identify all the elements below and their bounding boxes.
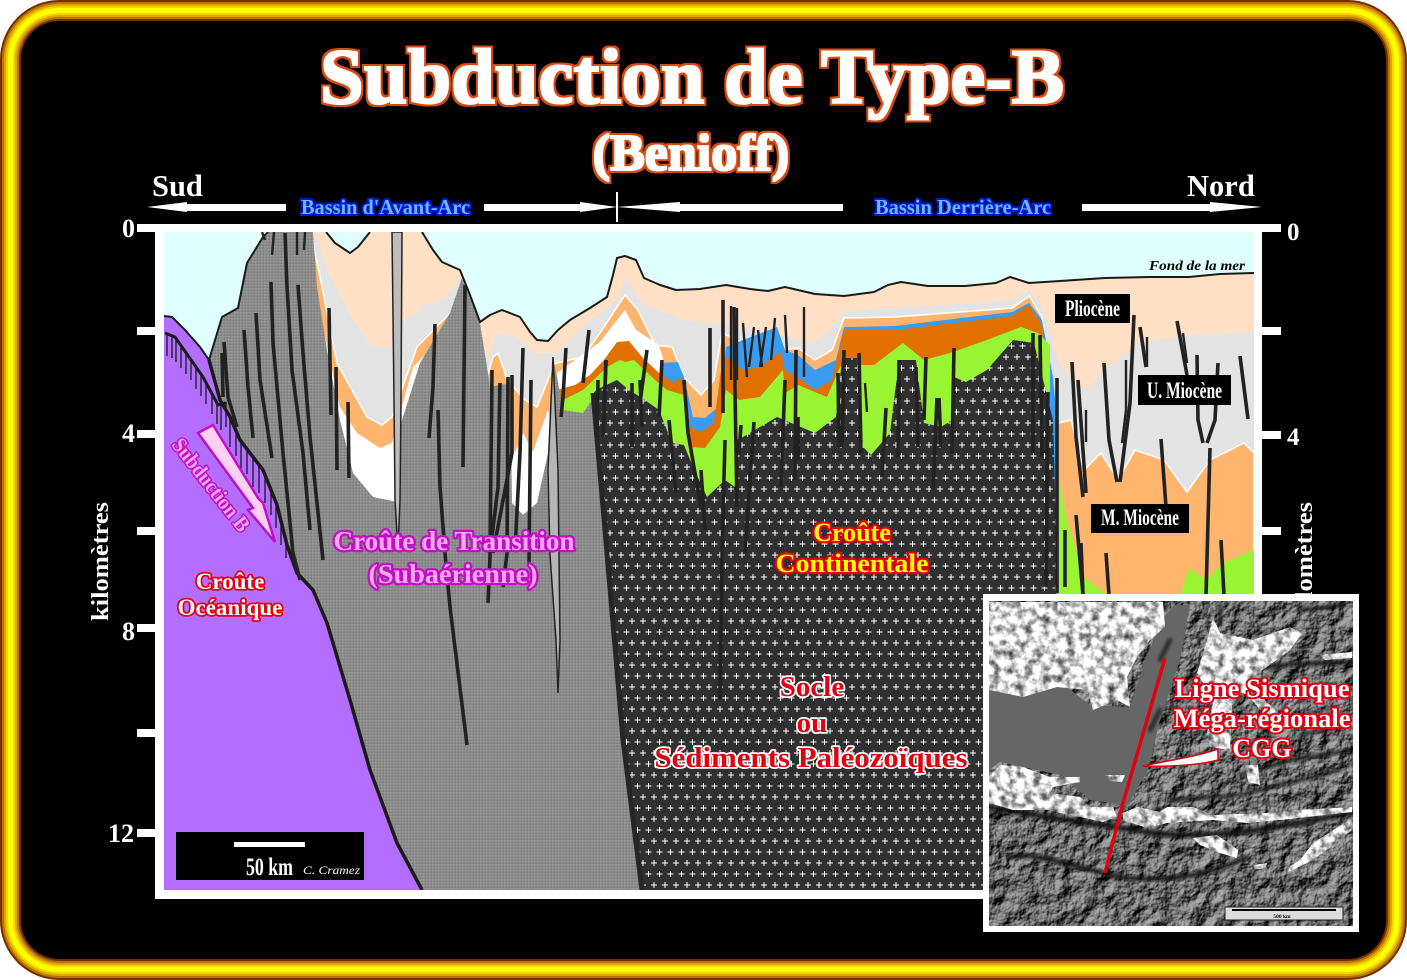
label: transition crust: Croûte de Transition (334, 526, 574, 556)
label: oceanic crust (178, 569, 282, 620)
land masses (989, 602, 1352, 873)
label: oceanic crust: Croûte (196, 569, 264, 594)
fault-zone strip (1056, 420, 1060, 595)
scale box: C. Cramez (303, 865, 361, 877)
label box: Upper Miocene: U. Miocène (1147, 378, 1222, 403)
arrow: back-arc west (617, 202, 843, 212)
seafloor line (326, 232, 370, 253)
faults: central basin (604, 300, 1057, 700)
label: continental crust (776, 518, 928, 578)
layer: Middle Miocene (314, 240, 1254, 593)
depth axes (88, 214, 1318, 848)
left depth numbers (108, 214, 135, 848)
layer: right green (1060, 482, 1254, 594)
label: basement: Sédiments Paléozoïques (654, 742, 968, 774)
map label: Ligne Sismique (1174, 674, 1350, 703)
layer: dark orange (557, 305, 1050, 450)
label box: Pliocene: Pliocène (1065, 296, 1120, 321)
layer: white basin 2 (512, 410, 553, 515)
label: continental crust: Continentale (776, 549, 928, 578)
thrust hatching (167, 334, 286, 558)
crust seafloor outline (164, 232, 268, 360)
left depth numbers: 12 (108, 819, 134, 848)
right ticks (1261, 224, 1281, 535)
map label: CGG (1232, 734, 1292, 763)
map label: Méga-régionale (1174, 704, 1350, 733)
right depth numbers (1287, 219, 1300, 451)
label box: Upper Miocene (1138, 375, 1231, 405)
chart frame (155, 224, 1262, 899)
label: transition crust (334, 526, 574, 589)
layer: Upper Miocene (314, 237, 1254, 490)
scale box: 50 km (246, 854, 293, 881)
label: back-arc basin: Bassin Derrière-Arc (875, 195, 1051, 219)
label: basement: Socle (780, 671, 844, 703)
map scale (1225, 907, 1343, 920)
boundary tick (616, 192, 618, 222)
arrow: fore-arc east (484, 202, 617, 212)
left ticks (137, 224, 156, 837)
left depth numbers: 8 (122, 617, 135, 646)
label: sea floor: Fond de la mer (1148, 258, 1246, 273)
layer: white basin 1 (324, 332, 425, 502)
layer: white basin 2 halo (511, 410, 550, 515)
faults: north basin (1065, 315, 1248, 595)
label box: Pliocene (1055, 294, 1130, 323)
label: basement: ou (797, 707, 827, 739)
right axis title: kilomètres (1292, 502, 1318, 621)
cross-section (164, 232, 1254, 890)
salt diapir west (392, 232, 402, 550)
seafloor line east (422, 232, 1254, 341)
subduction plane (209, 360, 422, 890)
seismic line (1105, 658, 1165, 873)
layer: green (564, 327, 1050, 497)
label box: Middle Miocene (1091, 504, 1189, 533)
right depth numbers: 0 (1287, 219, 1300, 246)
sea-floor relief (989, 601, 1353, 926)
left depth numbers: 4 (122, 419, 135, 448)
label: oceanic crust: Océanique (178, 595, 282, 620)
flat seas (989, 605, 1190, 805)
location map inset (983, 594, 1359, 932)
layer: blue (663, 303, 1056, 506)
scale box (176, 832, 364, 881)
label: basement (654, 671, 968, 774)
label box: Middle Miocene: M. Miocène (1101, 505, 1179, 530)
trenches and ridges (989, 605, 1352, 879)
map label (1174, 674, 1350, 763)
left depth numbers: 0 (122, 214, 135, 243)
water (164, 232, 1254, 358)
direction header (147, 169, 1262, 222)
salt diapir east (548, 357, 560, 693)
arrow: south (147, 202, 286, 212)
label: fore-arc basin: Bassin d'Avant-Arc (301, 195, 470, 219)
oceanic crust (164, 316, 422, 890)
arrow: north (1082, 202, 1262, 212)
map scale: 500 km (1273, 914, 1291, 920)
pointer arrow (1143, 749, 1218, 766)
label: Nord: Nord (1187, 169, 1255, 203)
layer: white basin 3 (557, 310, 664, 390)
faults: transition crust (222, 232, 606, 745)
arrow: subduction direction (198, 425, 275, 542)
layer: Pliocene (313, 232, 1254, 390)
accretionary thrust (165, 333, 226, 405)
label: transition crust: (Subaérienne) (368, 559, 538, 589)
right depth numbers: 4 (1287, 424, 1300, 451)
basement edge (593, 393, 642, 890)
label: Sud: Sud (152, 169, 203, 203)
transition crust (209, 232, 642, 890)
continental basement (593, 340, 1058, 890)
left axis title: kilomètres (88, 502, 114, 621)
label: continental crust: Croûte (813, 518, 891, 547)
label: subduction B: Subduction B (167, 433, 255, 536)
title: Subduction de Type-B (320, 33, 1064, 120)
subtitle: (Benioff) (593, 125, 789, 182)
